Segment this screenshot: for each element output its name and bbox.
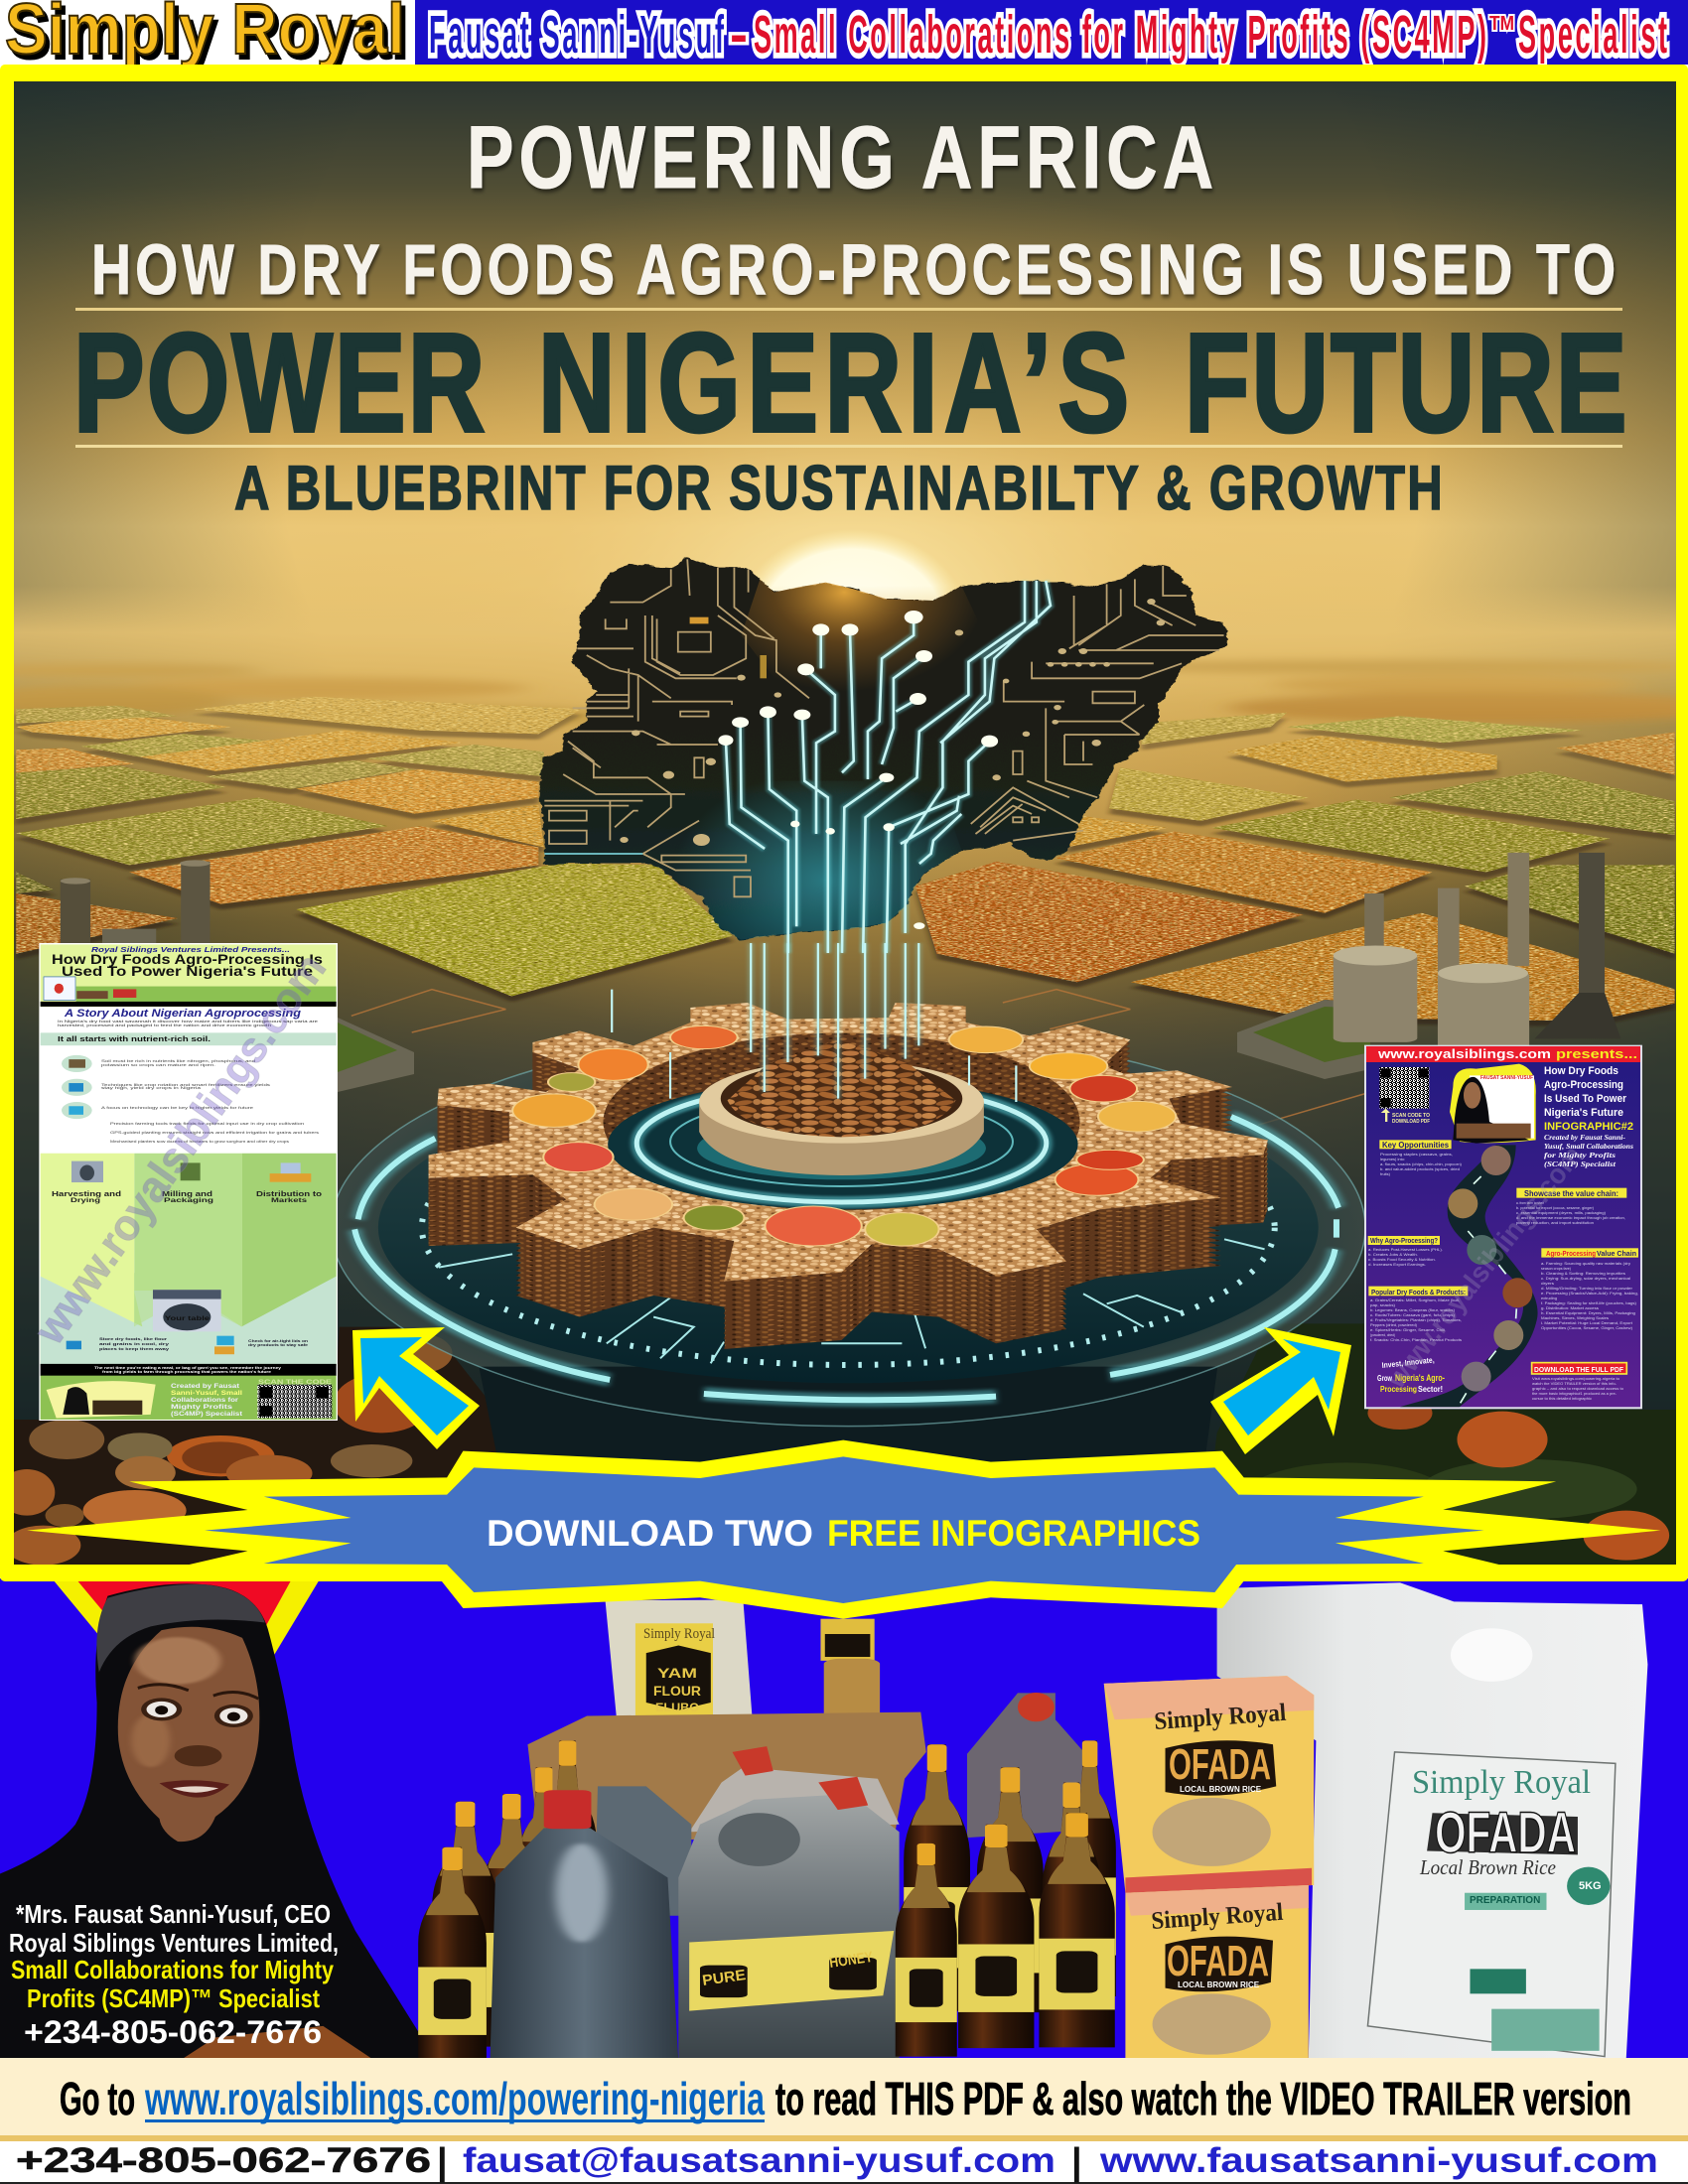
large honey jug left [490, 1790, 678, 2060]
specialist strip: Specialist [1518, 5, 1667, 66]
thumbnail two text: watch the VIDEO TRAILER version of this info- [1532, 1382, 1618, 1386]
thumbnail one text: It all starts with nutrient-rich soil. [58, 1036, 211, 1043]
thumbnail two text: Visit www.royalsiblings.com/powering-nigeria to [1532, 1377, 1619, 1381]
thumbnail one text: Milling and [162, 1191, 212, 1198]
main title: power nigeria's future [73, 305, 1626, 461]
central bowl of beans [697, 1039, 986, 1179]
product label text: HONEY [828, 1949, 874, 1972]
thumbnail two text: c. Drying: Sun-drying, solar dryers, mechanical [1541, 1277, 1630, 1281]
setting sun [737, 529, 967, 712]
thumbnail two text: fruits) [1380, 1172, 1390, 1176]
thumbnail two text: Agro-Processing [1546, 1249, 1596, 1258]
jar of beans [820, 1618, 880, 1713]
main title: power nigeria's future: FUTURE [1185, 305, 1626, 461]
thumbnail one text: GPS-guided planting ensures straight rows and efficient irrigation for grains and tubers [110, 1131, 319, 1135]
large honey jug right [678, 1777, 900, 2060]
lower left mushrooms and dried fruit [0, 1327, 506, 1569]
specialist strip: - [730, 5, 748, 65]
product label text: ELUBO [655, 1701, 699, 1714]
thumbnail two text: h. Essential Equipment: Dryers, Mills, Packaging [1541, 1311, 1635, 1315]
thumbnail one text: Your table [165, 1316, 211, 1322]
thumbnail two text: (SC4MP) Specialist [1544, 1160, 1617, 1168]
go to text: Go to [60, 2073, 135, 2124]
callout label: DOWNLOAD TWO [487, 1513, 813, 1554]
thumbnail one text: (SC4MP) Specialist [171, 1412, 242, 1418]
circuit pads [620, 599, 1165, 846]
product label text: FLOUR [653, 1683, 701, 1699]
left smokestacks [61, 860, 210, 947]
founder caption: Royal Siblings Ventures Limited, [9, 1928, 339, 1958]
free infographic thumbnail one [25, 943, 338, 1421]
gold circuit traces [544, 559, 1224, 896]
thumbnail two text: e. Spices/Herbs: Ginger, Sesame, Chili [1370, 1328, 1445, 1332]
thumbnail one text: Check for air-tight lids on [248, 1339, 308, 1343]
gold square chip [690, 617, 708, 623]
burst blue fill [205, 1456, 1484, 1603]
specialist strip: Small Collaborations for Mighty Profits (SC4MP) [754, 5, 1486, 66]
ground traces [352, 990, 1370, 1442]
dress trim [183, 2026, 371, 2058]
sky glow [14, 81, 1676, 1565]
thumbnail two text: Nigeria's Agro- [1395, 1373, 1445, 1383]
thumbnail one text: from big yields to farm through processing that powers the nation's future [102, 1370, 271, 1374]
thumbnail two text: extruding [1541, 1297, 1557, 1300]
cardboard carton [527, 1712, 926, 1840]
product label text: YAM [657, 1665, 697, 1681]
cyan circuit traces [726, 581, 1051, 953]
product label text: Simply Royal [1151, 1899, 1284, 1935]
tick marks ring [422, 1090, 1275, 1365]
top banner [0, 0, 1688, 69]
product label text: Simply Royal [1154, 1700, 1287, 1735]
specialist strip: Fausat Sanni-Yusuf [429, 5, 724, 66]
founder caption: *Mrs. Fausat Sanni-Yusuf, CEO [16, 1899, 331, 1929]
thumbnail one text: Collaborations for [171, 1398, 239, 1404]
thumbnail two text: f. Packaging: Sealing for shelf-life (pouches, bags) [1541, 1301, 1636, 1305]
thumbnail two text: Agro-Processing [1544, 1079, 1623, 1091]
thumbnail one text: Markets [271, 1198, 308, 1204]
thumbnail two text: a. Reduces Post-Harvest Losses (PHL). [1368, 1248, 1443, 1252]
specialist strip: TM [1489, 13, 1514, 35]
product label text: OFADA [1167, 1937, 1269, 1985]
thumbnail two text: SCAN CODE TO [1392, 1113, 1430, 1119]
red and yellow emblem behind portrait [54, 1581, 319, 1655]
main title: power nigeria's future: POWER [73, 305, 485, 461]
thumbnail two text: c. essential equipment (dryers, mills, packaging) [1516, 1211, 1606, 1215]
thumbnail one text: potassium so crops can mature and ripen. [101, 1063, 215, 1067]
founder headscarf [0, 1583, 436, 2060]
heading divider top [75, 308, 1622, 311]
thumbnail one text: In Nigeria's dry food vast savannah it discover how maize and tubers like indigenous sap varia are [58, 1020, 318, 1024]
hero scene [0, 81, 1688, 1569]
thumbnail one watermark: www.royalsiblings.com [25, 945, 336, 1354]
thumbnail two text: poverty reduction, and import substitution [1516, 1221, 1594, 1225]
glowing circuit nodes [718, 611, 998, 929]
phone number: +234-805-062-7676 [16, 2141, 431, 2180]
thumbnail two text: Opportunities (Cocoa, Sesame, Ginger, Cashew) [1541, 1326, 1632, 1330]
product label text: Local Brown Rice [1419, 1855, 1556, 1879]
thumbnail one text: Harvesting and [52, 1191, 121, 1198]
white rice sack [1217, 1582, 1647, 2058]
thumbnail two text: b. Cleaning & Sorting: Removing impurities [1541, 1272, 1625, 1276]
thumbnail one text: Drying [70, 1198, 101, 1204]
burst yellow outline [27, 1440, 1660, 1619]
thumbnail two text: Grow [1377, 1374, 1393, 1383]
thumbnail two watermark: www.royalsiblings.com [1380, 1140, 1588, 1394]
callout label [487, 1513, 1200, 1554]
product label text: PREPARATION [1470, 1895, 1540, 1906]
thumbnail two text: a. Grains/Cereals: Millet, Sorghum, Maize (kuli, [1370, 1298, 1460, 1302]
thumbnail two text: season crops fare) [1541, 1267, 1571, 1271]
distant field haze [0, 659, 1688, 727]
thumbnail two text: www.royalsiblings.com [1377, 1046, 1551, 1061]
specialist strip [415, 0, 1688, 66]
thumbnail two text: How Dry Foods [1544, 1065, 1618, 1077]
contact bar [0, 2135, 1688, 2184]
inner thin ring [670, 1097, 1013, 1186]
sky corner vignette [14, 81, 1676, 1565]
thumbnail two text: DOWNLOAD THE FULL PDF [1534, 1367, 1624, 1374]
brand panel [0, 0, 415, 65]
product label text: LOCAL BROWN RICE [1180, 1785, 1262, 1794]
thin circuit lines [439, 1239, 1265, 1363]
inner dark tick track [378, 1072, 1319, 1383]
thumbnail one text: dry products to stay safe [248, 1343, 308, 1347]
thumbnail one text: and grains in cool, dry [99, 1341, 170, 1346]
url link text: www.royalsiblings.com/powering-nigeria [144, 2073, 765, 2124]
founder face [118, 1627, 259, 1842]
thumbnail two text: Value Chain [1597, 1249, 1636, 1258]
product label text: OFADA [1169, 1740, 1271, 1789]
thumbnail one text: Techniques like crop rotation and smart fertilizers ensure yields [101, 1083, 270, 1087]
thumbnail one text: Used To Power Nigeria's Future [62, 963, 313, 979]
thumbnail two text: a. from farm to shelf [1516, 1201, 1544, 1205]
subtitle: A BLUEBRINT FOR SUSTAINABILTY & GROWTH [234, 453, 1443, 522]
callout label: FREE INFOGRAPHICS [827, 1513, 1200, 1554]
gear extruded side [429, 1006, 1268, 1349]
inner bright ring [636, 1084, 1047, 1202]
glowing outer ring arcs [354, 1117, 1338, 1400]
heading divider bottom [75, 445, 1622, 448]
rear honey bottles [432, 1740, 1116, 2047]
arrow pointing to right infographic [1210, 1327, 1351, 1454]
thumbnail two text: b. potential for export (cocoa, sesame, ginger) [1516, 1206, 1594, 1210]
thumbnail one text: Soil must be rich in nutrients like nitrogen, phosphorus, and [101, 1059, 255, 1063]
cyan data streams into bowl [612, 943, 1016, 1102]
thumbnail one text: A focus on technology can be key to higher yields for future [101, 1106, 253, 1110]
thumbnail two text: Showcase the value chain: [1524, 1189, 1618, 1198]
gear top face [429, 1003, 1268, 1282]
gold bar chip [760, 655, 767, 678]
thumbnail one text: SCAN THE CODE [258, 1380, 332, 1386]
heading text block [73, 108, 1626, 522]
thumbnail two text: Processing [1380, 1385, 1417, 1394]
download callout burst [27, 1440, 1660, 1619]
teal base line [544, 853, 642, 855]
thumbnail two text: Yusuf, Small Collaborations [1544, 1142, 1633, 1151]
url underline [145, 2119, 765, 2122]
thumbnail two text: DOWNLOAD PDF [1392, 1119, 1430, 1125]
thumbnail two text: d. and the immense economic impact through job creation, [1516, 1216, 1625, 1220]
thumbnail two text: d. Fruits/Vegetables: Plantain (chips), Tomatoes, [1370, 1318, 1462, 1322]
founder caption: Profits (SC4MP)™ Specialist [27, 1983, 320, 2013]
founder caption [9, 1899, 339, 2050]
gear made of grains [429, 1003, 1268, 1349]
thumbnail two text: e. Processing (Snacks/Value-Add): Frying, baking, [1541, 1292, 1638, 1296]
ring base disc [332, 1029, 1365, 1427]
golden light haze [14, 586, 1676, 923]
lower photo panel: founder and products [0, 1578, 1688, 2071]
separator: | [437, 2141, 448, 2183]
ofada rice box bottom [1125, 1885, 1309, 2058]
heading line: powering africa: POWERING AFRICA [467, 108, 1213, 207]
founder portrait and products illustration [0, 1580, 1647, 2071]
thumbnail one text: Mechanised planters sow dozens of hectares to grow sorghum and other dry crops [110, 1140, 289, 1144]
main title: power nigeria's future: NIGERIA’S [538, 305, 1129, 461]
thumbnail two text: Processing staples (cassava, grains, [1380, 1153, 1453, 1157]
thumbnail two text: a. Farming: Sourcing quality raw materials (dry [1541, 1262, 1630, 1266]
right planter [1237, 1000, 1370, 1079]
founder caption: +234-805-062-7676 [24, 2014, 322, 2050]
email: fausat@fausatsanni-yusuf.com [463, 2141, 1055, 2180]
map teal glow [652, 781, 961, 940]
thumbnail one text: Created by Fausat [171, 1384, 239, 1390]
product label text: OFADA [1435, 1801, 1576, 1865]
right chimneys and tanks [1334, 853, 1620, 1053]
free infographic thumbnail two [1364, 1045, 1642, 1409]
map gold glow [742, 579, 985, 708]
thin outer rim [332, 1029, 1365, 1427]
thumbnail one text: How Dry Foods Agro-Processing Is [52, 951, 323, 967]
thumbnail two text: cursor to this detailed infographic [1532, 1397, 1592, 1401]
thumbnail two text: Key Opportunities [1382, 1141, 1450, 1150]
thumbnail two text: d. Milling/Grinding: Turning into flour or powder [1541, 1287, 1633, 1291]
thumbnail two text [1368, 1046, 1638, 1401]
front left honey bottle [418, 1847, 487, 2071]
thumbnail two text: Peppers (dried, powdered) [1370, 1323, 1417, 1327]
yellow frame [0, 65, 1688, 1581]
thumbnail two text: b. and value-added products (spices, dried [1380, 1167, 1460, 1171]
thumbnail two text: Is Used To Power [1544, 1093, 1627, 1105]
thumbnail two text: i. Market Potential: Huge Local Demand, Export [1541, 1321, 1632, 1325]
thumbnail two text: Machines, Sieves, Weighing Scales [1541, 1316, 1609, 1320]
thumbnail one text: Royal Siblings Ventures Limited Presents... [91, 947, 290, 954]
thumbnail one text: Mighty Profits [171, 1405, 233, 1411]
product label text: 5KG [1579, 1880, 1602, 1892]
map silhouette [540, 558, 1228, 940]
inner glowing ring [636, 1084, 1047, 1202]
thumbnail two text: dryers [1541, 1282, 1554, 1286]
thumbnail two text: legumes) into: [1380, 1158, 1405, 1161]
thumbnail two text: b. Legumes: Beans, Cowpeas (flour, snacks) [1370, 1308, 1455, 1312]
back white jug [689, 1746, 900, 1832]
thumbnail two text: (powdered, dried) [1370, 1333, 1395, 1337]
thumbnail one text: Store dry foods, like flour [99, 1336, 168, 1341]
back grey jug [967, 1693, 1085, 1838]
thumbnail two text: d. Increases Export Earnings. [1368, 1263, 1426, 1267]
thumbnail two text: f. Snacks: Chin-Chin, Plantain, Peanut Products [1370, 1338, 1462, 1342]
lower right foliage and oranges [1211, 1323, 1680, 1569]
product label text: Simply Royal [1412, 1764, 1591, 1801]
bright outer ring arcs [354, 1117, 1338, 1400]
sky and ground gradient [14, 81, 1676, 1565]
thumbnail one text: Sanni-Yusuf, Small [171, 1391, 242, 1397]
separator: | [1071, 2141, 1082, 2183]
thumbnail two text: for Mighty Profits [1544, 1151, 1616, 1160]
front honey bottles [896, 1813, 1115, 2057]
thumbnail two text: Invest, Innovate, [1381, 1355, 1435, 1370]
founder caption: Small Collaborations for Mighty [11, 1955, 334, 1984]
circuit platform [332, 990, 1370, 1566]
hood highlight [96, 1584, 265, 1672]
thumbnail two text: Sector! [1418, 1385, 1443, 1394]
call to action bar [0, 2058, 1688, 2135]
thumbnail two text: c. Roots/Tubers: Cassava (garri, fufu, chips) [1370, 1313, 1455, 1317]
blue backdrop [0, 1578, 1688, 2065]
left planter [265, 1018, 414, 1092]
yam flour pouch [606, 1600, 753, 1715]
thumbnail one text: stay high, yield dry crops in Nigeria [101, 1086, 201, 1090]
back dark jug [595, 1786, 691, 1916]
thumbnail two text: b. Creates Jobs & Wealth. [1368, 1253, 1418, 1257]
thumbnail two text: Nigeria's Future [1544, 1107, 1623, 1119]
thumbnail one text [52, 947, 332, 1418]
thumbnail two text: graphic – and also to request download access to [1532, 1387, 1623, 1391]
gear inner wall [603, 1033, 1080, 1210]
thumbnail two text: pap, snacks) [1370, 1303, 1395, 1307]
thumbnail one text: A Story About Nigerian Agroprocessing [64, 1008, 301, 1020]
thumbnail two text: presents... [1556, 1046, 1637, 1061]
gear hub floor [608, 1079, 1078, 1209]
thumbnail one text: The next time you're eating a meal, or bag of garri you see, remember the journey [94, 1366, 281, 1370]
thumbnail two text: a. flours, snacks (chips, chin-chin, popcorn) [1380, 1162, 1462, 1166]
heading line: how dry foods: HOW DRY FOODS AGRO-PROCESSING IS USED TO [91, 230, 1616, 310]
thumbnail two text: Created by Fausat Sanni- [1544, 1133, 1626, 1142]
thumbnail two text: Popular Dry Foods & Products: [1371, 1288, 1466, 1297]
centre dark platform [479, 1367, 1217, 1566]
thumbnail two text: INFOGRAPHIC#2 [1544, 1121, 1633, 1133]
nigeria circuit map [540, 558, 1228, 953]
product label text [643, 1626, 1602, 1989]
thumbnail one text: places to keep them away [99, 1346, 170, 1351]
product label text: PURE [701, 1967, 747, 1989]
thumbnail two text: Why Agro-Processing? [1370, 1236, 1438, 1245]
thumbnail one text: harvested, processed and packaged to feed the nation and drive economic growth [58, 1024, 271, 1027]
thumbnail two text: c. Boosts Food Security & Nutrition. [1368, 1258, 1436, 1262]
crop fields [16, 697, 1675, 1022]
citrus slices on gear [512, 1025, 1176, 1246]
thumbnail two text: FAUSAT SANNI-YUSUF [1480, 1075, 1533, 1081]
thumbnail one text: Packaging [164, 1198, 214, 1204]
thumbnail one text: Distribution to [256, 1191, 322, 1198]
website: www.fausatsanni-yusuf.com [1099, 2141, 1658, 2180]
product label text: LOCAL BROWN RICE [1178, 1980, 1260, 1989]
cyan circuit traces glow [726, 581, 1051, 953]
thumbnail one text: Precision farming tools track fields for optimal input use in dry crop cultivation [110, 1122, 304, 1126]
arrow pointing to left infographic [352, 1327, 480, 1449]
product label text: Simply Royal [643, 1626, 715, 1642]
thumbnail two text: g. Distribution: Market access [1541, 1306, 1599, 1310]
ofada rice box top [1104, 1676, 1314, 1893]
thumbnail two text: the more basic infographic#1 produced as a pre- [1532, 1392, 1618, 1396]
